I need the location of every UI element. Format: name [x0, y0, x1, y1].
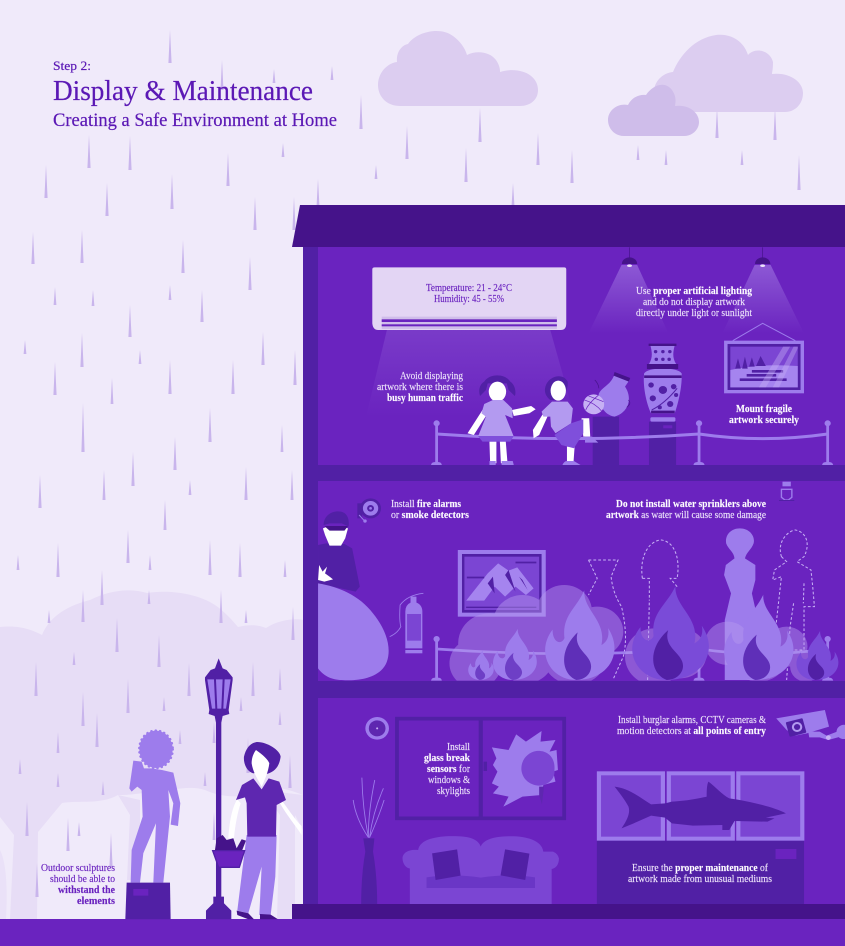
basket: [213, 835, 246, 867]
rope barrier: [431, 636, 833, 681]
window: [397, 719, 564, 818]
label: unusual mediums: [628, 862, 772, 885]
smoke cloud: left: [449, 585, 623, 688]
sofa: [403, 836, 559, 904]
flame: far right: [796, 631, 838, 680]
label: artificial lighting: Use proper artificial lighting: [636, 285, 753, 297]
outdoor sculptures note: withstand the: [58, 884, 115, 896]
light beams: [366, 265, 804, 417]
painted vase: [644, 344, 682, 413]
label: glass break sensors: skylights: [437, 785, 470, 797]
fire and smoke: [449, 585, 838, 688]
floor 3: bottom room: [353, 710, 845, 904]
label: fire alarms: Install fire alarms: [391, 498, 461, 510]
label: glass break sensors: glass break: [424, 752, 470, 764]
step label: Step 2:: [53, 58, 91, 73]
street lamp: [205, 658, 233, 919]
marble statue: [724, 528, 757, 680]
label: human traffic: busy human traffic: [387, 392, 463, 404]
main heading: Display & Maintenance: [53, 75, 313, 107]
tipping vase: [595, 372, 630, 417]
outdoor sculptures note: [41, 862, 115, 907]
woman with basket: [213, 742, 302, 919]
shattered glass: [492, 731, 558, 807]
rope barrier: [431, 420, 833, 465]
label: human traffic: Avoid displaying: [400, 370, 463, 382]
label: air conditioner settings: Temperature: 21 - 24°C: [426, 282, 512, 294]
label: water sprinklers: Do not install water sprinklers above: [616, 498, 766, 510]
smoke cloud: right: [625, 622, 812, 681]
outdoor sculptures note: should be able to: [50, 873, 115, 885]
flame: centre dark: [632, 586, 709, 680]
sprinkler: [779, 482, 794, 501]
loot bag: [318, 583, 389, 680]
painting: [458, 550, 546, 617]
hanging picture: [724, 323, 804, 393]
label: fire alarms: [391, 498, 469, 521]
label: human traffic: [377, 370, 463, 404]
label: fire alarms: or smoke detectors: [391, 509, 469, 521]
label: burglar alarms: motion detectors at all points of entry: [617, 725, 767, 737]
label: glass break sensors: Install: [447, 741, 470, 753]
label: glass break sensors: [424, 741, 471, 797]
shark triptych: [599, 773, 802, 839]
air conditioner: [372, 267, 566, 330]
pedestals: [593, 417, 676, 465]
cloud: large: [378, 31, 538, 106]
cloud: right: [654, 35, 803, 112]
basketball: [583, 394, 604, 414]
ground: [0, 919, 845, 946]
label: air conditioner settings: Humidity: 45 - 55%: [434, 293, 504, 305]
floor 1: top room: [366, 247, 833, 465]
label: glass break sensors: sensors for: [427, 763, 470, 775]
outdoor sculptures note: elements: [77, 895, 115, 907]
flame: small left: [468, 650, 494, 680]
label: burglar alarms: [617, 714, 767, 737]
flame: right: [724, 595, 793, 680]
label: mount fragile artwork: artwork securely: [729, 414, 800, 426]
label: mount fragile artwork: Mount fragile: [736, 403, 792, 415]
floor 2: middle room: [318, 482, 838, 688]
cloud: small: [608, 85, 699, 136]
flame: centre-left large: [545, 590, 614, 680]
label: artificial lighting: and do not display artwork: [643, 296, 746, 308]
fire alarm: [357, 498, 381, 523]
plinth: [125, 883, 171, 919]
thief: [318, 511, 360, 592]
outdoor statue: [125, 731, 180, 919]
label: water sprinklers: artwork as water will cause some damage: [606, 509, 766, 521]
label: human traffic: artwork where there is: [377, 381, 463, 393]
label: air conditioner settings: [426, 282, 512, 305]
label: glass break sensors: windows &: [428, 774, 471, 786]
plant vase: [353, 778, 384, 904]
title block: [53, 58, 337, 131]
dashed silhouettes: [589, 530, 814, 680]
label: mount fragile artwork: [729, 403, 800, 426]
art cabinet: [597, 841, 804, 904]
label: water sprinklers: [606, 498, 766, 521]
label: burglar alarms: Install burglar alarms, CCTV cameras &: [618, 714, 767, 726]
girl: [468, 375, 536, 465]
label: artificial lighting: [636, 285, 753, 319]
label: artificial lighting: directly under light or sunlight: [636, 307, 752, 319]
glass break sensor: [365, 717, 389, 740]
ceiling lamps: [622, 247, 770, 267]
label: unusual mediums: artwork made from unusual mediums: [628, 873, 772, 885]
outdoor sculptures note: Outdoor sculptures: [41, 862, 115, 874]
subheading: Creating a Safe Environment at Home: [53, 110, 337, 131]
house structure: [292, 205, 845, 920]
boy: [533, 376, 598, 465]
extinguisher: [390, 593, 423, 653]
label: unusual mediums: Ensure the proper maintenance of: [632, 862, 768, 874]
flame: left: [493, 629, 537, 680]
trees: [0, 590, 303, 919]
cctv camera: [776, 710, 845, 740]
